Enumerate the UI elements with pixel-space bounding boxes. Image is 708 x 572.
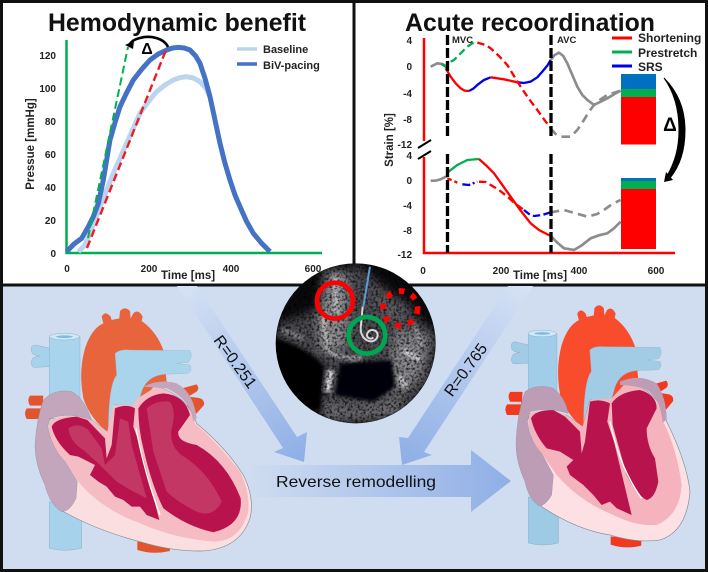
legend: Shortening — [638, 31, 701, 45]
strain x tick labels: 400 — [571, 266, 588, 277]
axis break marks — [418, 140, 431, 159]
x axis tick labels: 0 — [64, 264, 70, 275]
left ventricle inner — [147, 401, 222, 514]
red circle: latest site — [317, 283, 353, 319]
panel: hemodynamic benefit — [25, 9, 322, 282]
pulmonary veins — [505, 381, 673, 415]
x axis tick labels: 400 — [223, 264, 240, 275]
correlation label right: R=0.765 — [442, 341, 491, 400]
MVC dashed line — [446, 35, 449, 253]
panel: reverse remodelling background — [1, 285, 707, 570]
strain y tick labels: -12 — [398, 140, 412, 151]
y axis tick labels: 20 — [45, 216, 56, 227]
y axis tick labels: 80 — [45, 117, 56, 128]
y axis tick labels: 60 — [45, 150, 56, 161]
right ventricle chamber — [531, 400, 632, 515]
red dotted circle — [383, 291, 418, 326]
lead coil — [361, 307, 378, 341]
septum highlight — [610, 422, 642, 498]
heading: acute recoordination: Acute recoordination — [405, 9, 655, 37]
MVC label: MVC — [452, 35, 473, 46]
y axis tick labels — [39, 51, 56, 260]
green circle: lead site — [349, 317, 385, 354]
y axis tick labels: 0 — [50, 249, 56, 260]
reverse remodelling label: Reverse remodelling — [276, 474, 436, 491]
y axis tick labels: 120 — [39, 51, 56, 62]
correlation label left: R=0.251 — [210, 333, 259, 392]
left ventricle chamber — [612, 390, 658, 500]
tangent: green dashed — [88, 47, 128, 238]
left atrium — [620, 378, 667, 422]
pulmonary veins — [25, 384, 204, 419]
chart axes — [66, 40, 322, 253]
AVC label: AVC — [557, 35, 576, 46]
heading: hemodynamic benefit: Hemodynamic benefit — [48, 9, 307, 37]
strain y tick labels: 0 — [406, 62, 412, 73]
left atrium — [143, 381, 197, 422]
aorta — [81, 308, 167, 432]
right ventricle and atrium chamber — [52, 406, 159, 520]
strain y tick labels: -4 — [403, 89, 412, 100]
panel: acute recoordination — [384, 9, 701, 282]
strain y axis title: Strain [%] — [384, 113, 396, 167]
descending aorta — [611, 536, 641, 547]
heart: after remodelling — [505, 305, 690, 547]
tangent: red dashed — [87, 50, 166, 248]
legend: BiV-pacing — [263, 60, 320, 72]
curve: BiV-pacing — [67, 47, 270, 252]
myocardium outer — [50, 387, 251, 551]
strain axes — [424, 38, 675, 253]
strain chart — [384, 31, 701, 282]
arrow: R=0.765 — [399, 286, 533, 465]
strain x tick labels — [420, 266, 665, 277]
strain curves — [431, 43, 621, 250]
delta arrow — [125, 37, 168, 58]
legend: Baseline — [263, 44, 308, 56]
delta curved arrow — [663, 78, 685, 182]
curve: baseline — [78, 77, 210, 252]
strain y tick labels: 0 — [406, 176, 412, 187]
left ventricle chamber — [138, 393, 241, 532]
myocardium outer — [528, 382, 690, 541]
x axis tick labels: 600 — [305, 264, 322, 275]
AVC dashed line — [549, 35, 553, 253]
aorta — [558, 305, 638, 428]
legend: Prestretch — [638, 46, 697, 60]
myocardium wall — [48, 387, 249, 542]
arrow: R=0.251 — [177, 286, 307, 462]
delta arrow: Δ — [141, 41, 153, 58]
x axis title: Time [ms] — [161, 270, 215, 282]
heart: baseline — [25, 308, 251, 553]
right atrium — [516, 386, 568, 506]
septum highlight — [136, 428, 160, 515]
echocardiogram image — [273, 262, 440, 425]
right atrium — [35, 391, 92, 512]
arrow: reverse remodelling — [245, 450, 511, 512]
legend — [237, 44, 320, 72]
strain y tick labels: -8 — [403, 115, 412, 126]
strain x tick labels: 0 — [420, 266, 426, 277]
right ventricle inner — [68, 418, 147, 498]
y axis tick labels: 100 — [39, 84, 56, 95]
y axis tick labels: 40 — [45, 183, 56, 194]
x axis tick labels: 200 — [141, 264, 158, 275]
y axis title: Pressue [mmHg] — [25, 98, 37, 190]
strain y tick labels: -8 — [403, 226, 412, 237]
superior vena cava — [31, 333, 80, 398]
strain y tick labels: -12 — [398, 250, 412, 261]
legend: SRS — [638, 60, 663, 74]
strain x axis title: Time [ms] — [513, 270, 567, 282]
strain y tick labels: 4 — [406, 151, 412, 162]
stacked bar: top — [621, 74, 656, 144]
lead wire — [363, 267, 370, 307]
strain y tick labels — [398, 36, 412, 261]
myocardium wall — [528, 382, 682, 525]
delta curved arrow: Δ — [663, 115, 677, 136]
great vessels — [505, 305, 673, 547]
strain y tick labels: 4 — [406, 36, 412, 47]
legend — [612, 31, 701, 74]
inferior vena cava — [528, 497, 559, 545]
strain x tick labels: 600 — [648, 266, 665, 277]
inferior vena cava — [49, 502, 82, 550]
superior vena cava — [511, 330, 557, 395]
x axis tick labels — [64, 264, 322, 275]
pressure chart — [25, 37, 322, 282]
descending aorta — [137, 542, 170, 553]
strain y tick labels: -4 — [403, 201, 412, 212]
pulmonary artery — [583, 346, 661, 428]
strain x tick labels: 200 — [493, 266, 510, 277]
pulmonary artery — [108, 350, 191, 432]
stacked bar: bottom — [621, 178, 656, 249]
